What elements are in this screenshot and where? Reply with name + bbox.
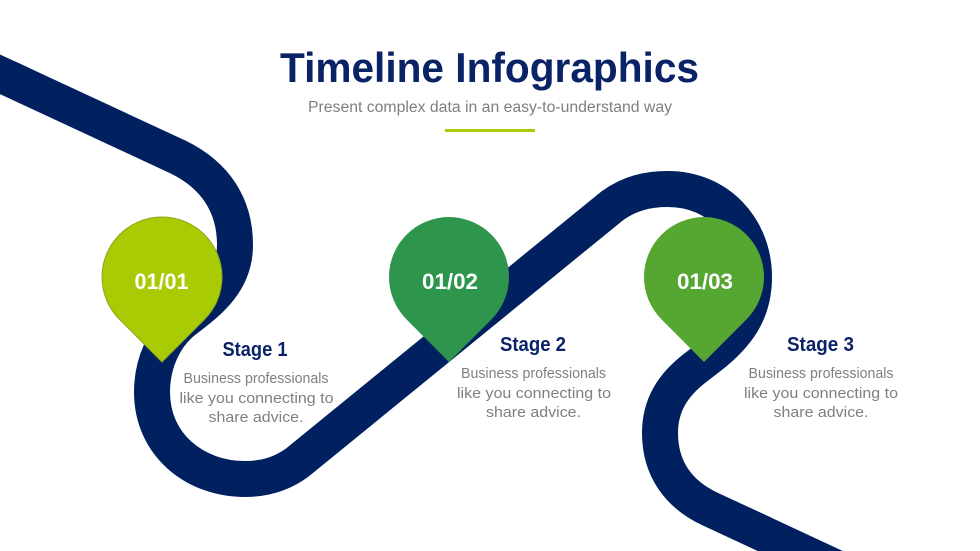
text block: stage 2: Business professionals [461, 365, 606, 382]
text block: stage 1 [180, 339, 334, 426]
pin: stage 1 [102, 217, 222, 362]
pin: stage 1: 01/01 [134, 269, 188, 294]
subtitle: Present complex data in an easy-to-understand way [308, 99, 672, 116]
text block: stage 1: Business professionals [184, 370, 328, 387]
text block: stage 3: share advice. [774, 404, 868, 421]
text block: stage 1: share advice. [208, 409, 304, 426]
pin: stage 3 [644, 217, 764, 362]
pin: stage 3: 01/03 [677, 269, 733, 294]
text block: stage 3 [744, 334, 898, 421]
text block: stage 1: Stage 1 [222, 339, 288, 361]
text block: stage 2: like you connecting to [457, 385, 611, 402]
text block: stage 3: Business professionals [748, 365, 894, 382]
text block: stage 2: Stage 2 [500, 334, 566, 356]
title: Timeline Infographics [280, 44, 699, 91]
pin: stage 2 [389, 217, 509, 362]
text block: stage 3: Stage 3 [787, 334, 854, 356]
text block: stage 2: share advice. [486, 404, 581, 421]
text block: stage 2 [457, 334, 611, 421]
winding timeline road [0, 54, 843, 551]
pin: stage 2: 01/02 [422, 269, 478, 294]
title accent rule [445, 129, 535, 132]
text block: stage 1: like you connecting to [180, 390, 334, 407]
text block: stage 3: like you connecting to [744, 385, 898, 402]
